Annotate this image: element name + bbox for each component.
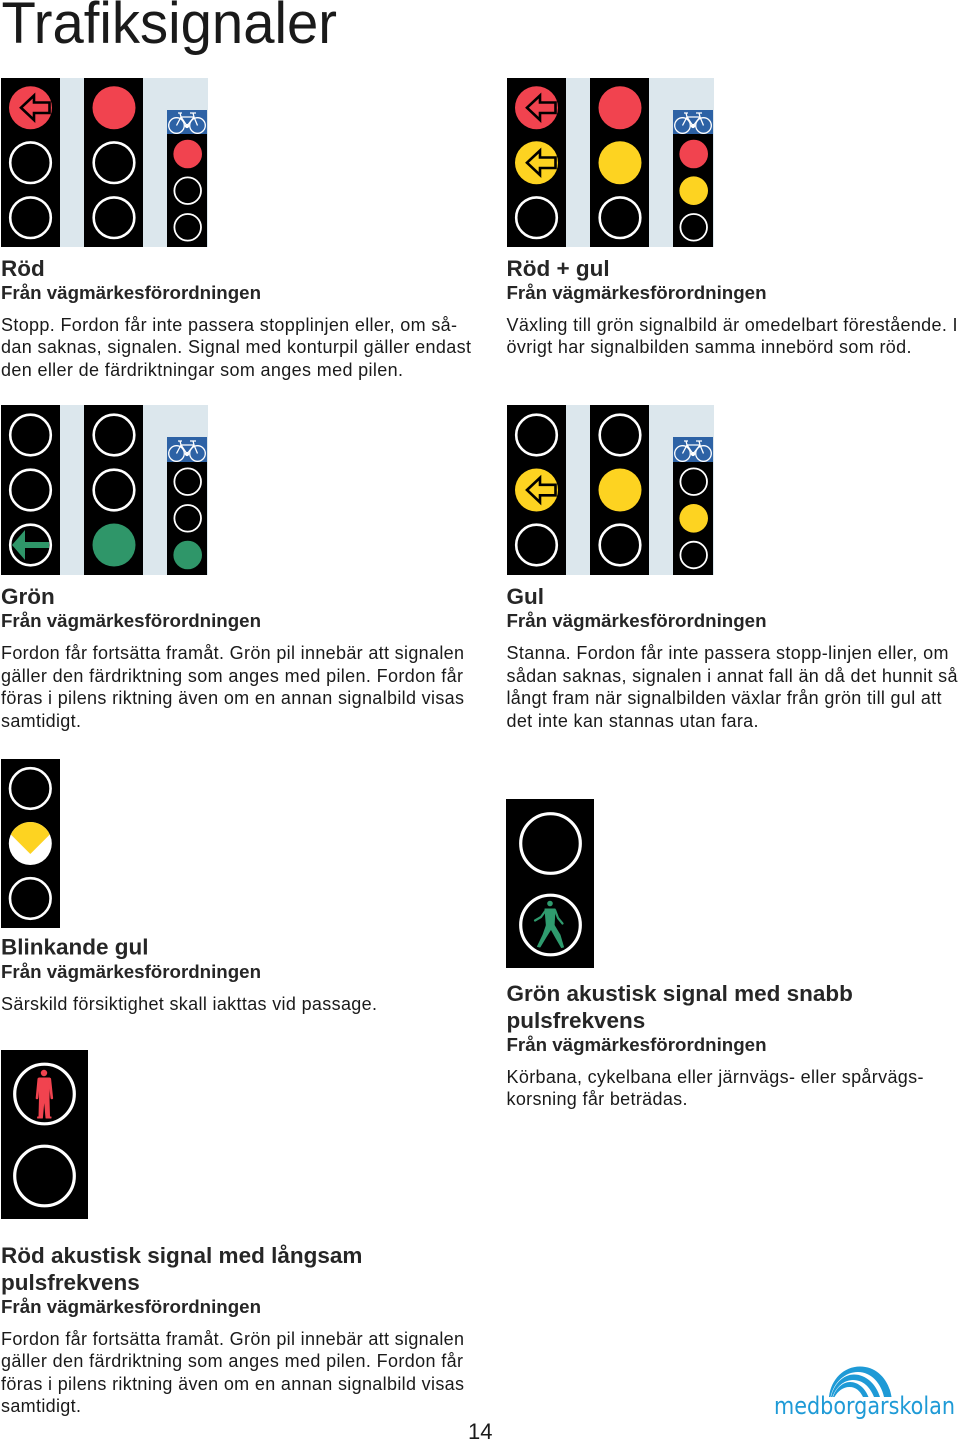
body text: dan saknas, signalen. Signal med konturpil gäller endast bbox=[1, 337, 471, 357]
heading: pulsfrekvens bbox=[506, 1008, 645, 1033]
body text bbox=[1, 1329, 464, 1416]
body text: Fordon får fortsätta framåt. Grön pil innebär att signalen bbox=[1, 1329, 464, 1349]
body text: korsning får beträdas. bbox=[506, 1089, 688, 1109]
body text: föras i pilens riktning även om en annan signalbild visas bbox=[1, 1374, 464, 1394]
body text: Fordon får fortsätta framåt. Grön pil innebär att signalen bbox=[1, 643, 464, 663]
body text: det inte kan stannas utan fara. bbox=[506, 711, 758, 731]
icon: standing figure bbox=[37, 1070, 52, 1118]
source: Från vägmärkesförordningen bbox=[1, 611, 261, 631]
signal image: Gul bbox=[507, 405, 714, 575]
source: Från vägmärkesförordningen bbox=[1, 283, 261, 303]
body text bbox=[506, 643, 958, 731]
heading: Gul bbox=[506, 584, 544, 609]
heading: Blinkande gul bbox=[1, 934, 149, 960]
body text: långt fram när signalbilden växlar från grön till gul att bbox=[506, 688, 942, 708]
panel: Gul bbox=[506, 405, 958, 731]
source: Från vägmärkesförordningen bbox=[506, 1035, 766, 1055]
body text bbox=[1, 643, 464, 731]
panel: Röd + gul bbox=[506, 78, 958, 357]
panel: Röd akustisk signal bbox=[1, 1050, 464, 1416]
body text: sådan saknas, signalen i annat fall än då det hunnit så bbox=[506, 666, 958, 686]
source: Från vägmärkesförordningen bbox=[506, 283, 766, 303]
source: Från vägmärkesförordningen bbox=[506, 611, 766, 631]
heading: Röd bbox=[1, 256, 45, 281]
signal image: Röd bbox=[1, 78, 208, 247]
body text: Stanna. Fordon får inte passera stopp-linjen eller, om bbox=[506, 643, 948, 663]
heading bbox=[506, 981, 853, 1033]
body text: föras i pilens riktning även om en annan signalbild visas bbox=[1, 688, 464, 708]
body text: Växling till grön signalbild är omedelbart förestående. I bbox=[506, 315, 958, 335]
body text: Stopp. Fordon får inte passera stopplinjen eller, om så- bbox=[1, 315, 457, 335]
body text: samtidigt. bbox=[1, 711, 81, 731]
panel: Grön akustisk signal bbox=[506, 799, 924, 1109]
body text bbox=[1, 315, 471, 380]
logo: medborgarskolan bbox=[774, 1366, 955, 1420]
panel: Röd bbox=[1, 78, 471, 380]
body text bbox=[506, 315, 958, 357]
heading: Grön akustisk signal med snabb bbox=[506, 981, 853, 1006]
heading: Grön bbox=[1, 584, 55, 609]
body text: gäller den färdriktning som anges med pilen. Fordon får bbox=[1, 1351, 463, 1371]
body text: Särskild försiktighet skall iakttas vid passage. bbox=[1, 994, 377, 1014]
heading bbox=[1, 1243, 362, 1295]
body text: gäller den färdriktning som anges med pilen. Fordon får bbox=[1, 666, 463, 686]
heading: pulsfrekvens bbox=[1, 1270, 140, 1295]
source: Från vägmärkesförordningen bbox=[1, 1297, 261, 1317]
heading: Röd + gul bbox=[506, 256, 610, 281]
signal image: Grön bbox=[1, 405, 208, 575]
body text bbox=[506, 1067, 924, 1109]
body text: samtidigt. bbox=[1, 1396, 81, 1416]
signal image: Blinkande gul bbox=[1, 759, 60, 928]
signal image: red pedestrian bbox=[1, 1050, 88, 1219]
icon: walking figure bbox=[535, 901, 564, 948]
body text: den eller de färdriktningar som anges med pilen. bbox=[1, 360, 403, 380]
panel: Blinkande gul bbox=[1, 759, 377, 1014]
panel: Grön bbox=[1, 405, 464, 731]
body text: övrigt har signalbilden samma innebörd som röd. bbox=[506, 337, 912, 357]
source: Från vägmärkesförordningen bbox=[1, 962, 261, 982]
body text: Körbana, cykelbana eller järnvägs- eller spårvägs- bbox=[506, 1067, 924, 1087]
signal image: green pedestrian bbox=[506, 799, 594, 968]
icon: rainbow arcs bbox=[829, 1366, 892, 1397]
signal image: Röd + gul bbox=[507, 78, 714, 247]
heading: Röd akustisk signal med långsam bbox=[1, 1243, 362, 1268]
